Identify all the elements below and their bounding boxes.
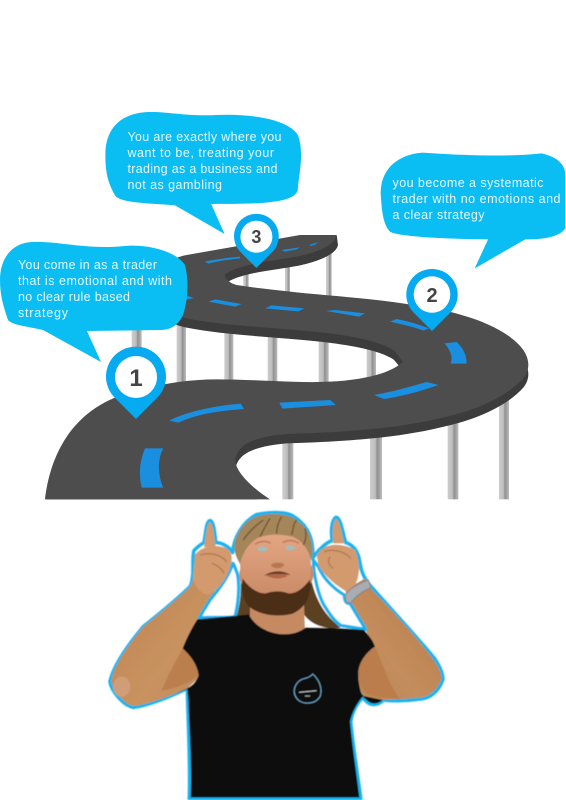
speech bubble 1 (0, 242, 187, 362)
right inner arm shade (358, 647, 400, 699)
neck (250, 603, 305, 635)
left inner arm shade (162, 648, 199, 691)
bubble 1 shape (0, 242, 187, 362)
long hair at back (237, 580, 341, 628)
right hand (317, 519, 359, 593)
beard (242, 578, 310, 615)
road support poles (132, 247, 509, 499)
map pin 3: 3 (251, 227, 261, 247)
left arm (111, 578, 217, 706)
speech bubble 3 (105, 112, 301, 234)
map pin 1: 1 (129, 365, 143, 392)
man pointing upward (110, 513, 443, 798)
nose (271, 563, 284, 568)
face (240, 534, 311, 599)
bubble 3 text: trading as a business and (128, 162, 278, 176)
eyes (258, 546, 295, 551)
bubble 2 shape (381, 153, 565, 268)
mouth (267, 574, 288, 578)
road illustration (45, 235, 528, 509)
shirt logo (294, 674, 321, 703)
bubble 2 text: a clear strategy (392, 208, 485, 222)
bubble 1 text (18, 258, 172, 320)
map pin 2: 2 (426, 285, 438, 307)
ears (239, 565, 313, 584)
blond hair (234, 514, 312, 564)
road centre dashes (140, 242, 467, 488)
bubble 3 text: want to be, treating your (126, 146, 274, 160)
bubble 3 text: not as gambling (128, 178, 222, 192)
black t-shirt (175, 615, 383, 797)
right arm (345, 578, 442, 700)
bubble 2 text (392, 176, 561, 222)
left hand knuckle lines (200, 554, 227, 573)
road surface (45, 235, 528, 499)
brow shading (255, 540, 299, 544)
bubble 2 text: you become a systematic (392, 176, 544, 190)
gap between right arm and head (313, 560, 366, 629)
bubble 1 text: that is emotional and with (18, 274, 172, 288)
bubble 1 text: strategy (18, 306, 69, 320)
speech bubble 2 (381, 153, 565, 268)
shirt logo mark (299, 691, 317, 696)
bubble 3 shape (105, 112, 301, 234)
left hand (193, 522, 232, 595)
moustache (264, 571, 291, 576)
map pin 2 (406, 269, 458, 331)
bubble 1 text: no clear rule based (18, 290, 130, 304)
hair strands (243, 517, 306, 545)
right hand knuckle lines (324, 550, 351, 568)
gap between left arm and head (199, 563, 239, 618)
left elbow highlight (113, 677, 130, 697)
map pin 1 (106, 347, 166, 419)
wrist watch (345, 580, 371, 603)
bubble 2 text: trader with no emotions and (392, 192, 561, 206)
bubble 3 text (126, 130, 282, 192)
road side thickness (45, 235, 528, 509)
bubble 3 text: You are exactly where you (128, 130, 282, 144)
bubble 1 text: You come in as a trader (18, 258, 157, 272)
map pin 3 (234, 214, 279, 268)
blue cut-out outline (110, 513, 443, 798)
